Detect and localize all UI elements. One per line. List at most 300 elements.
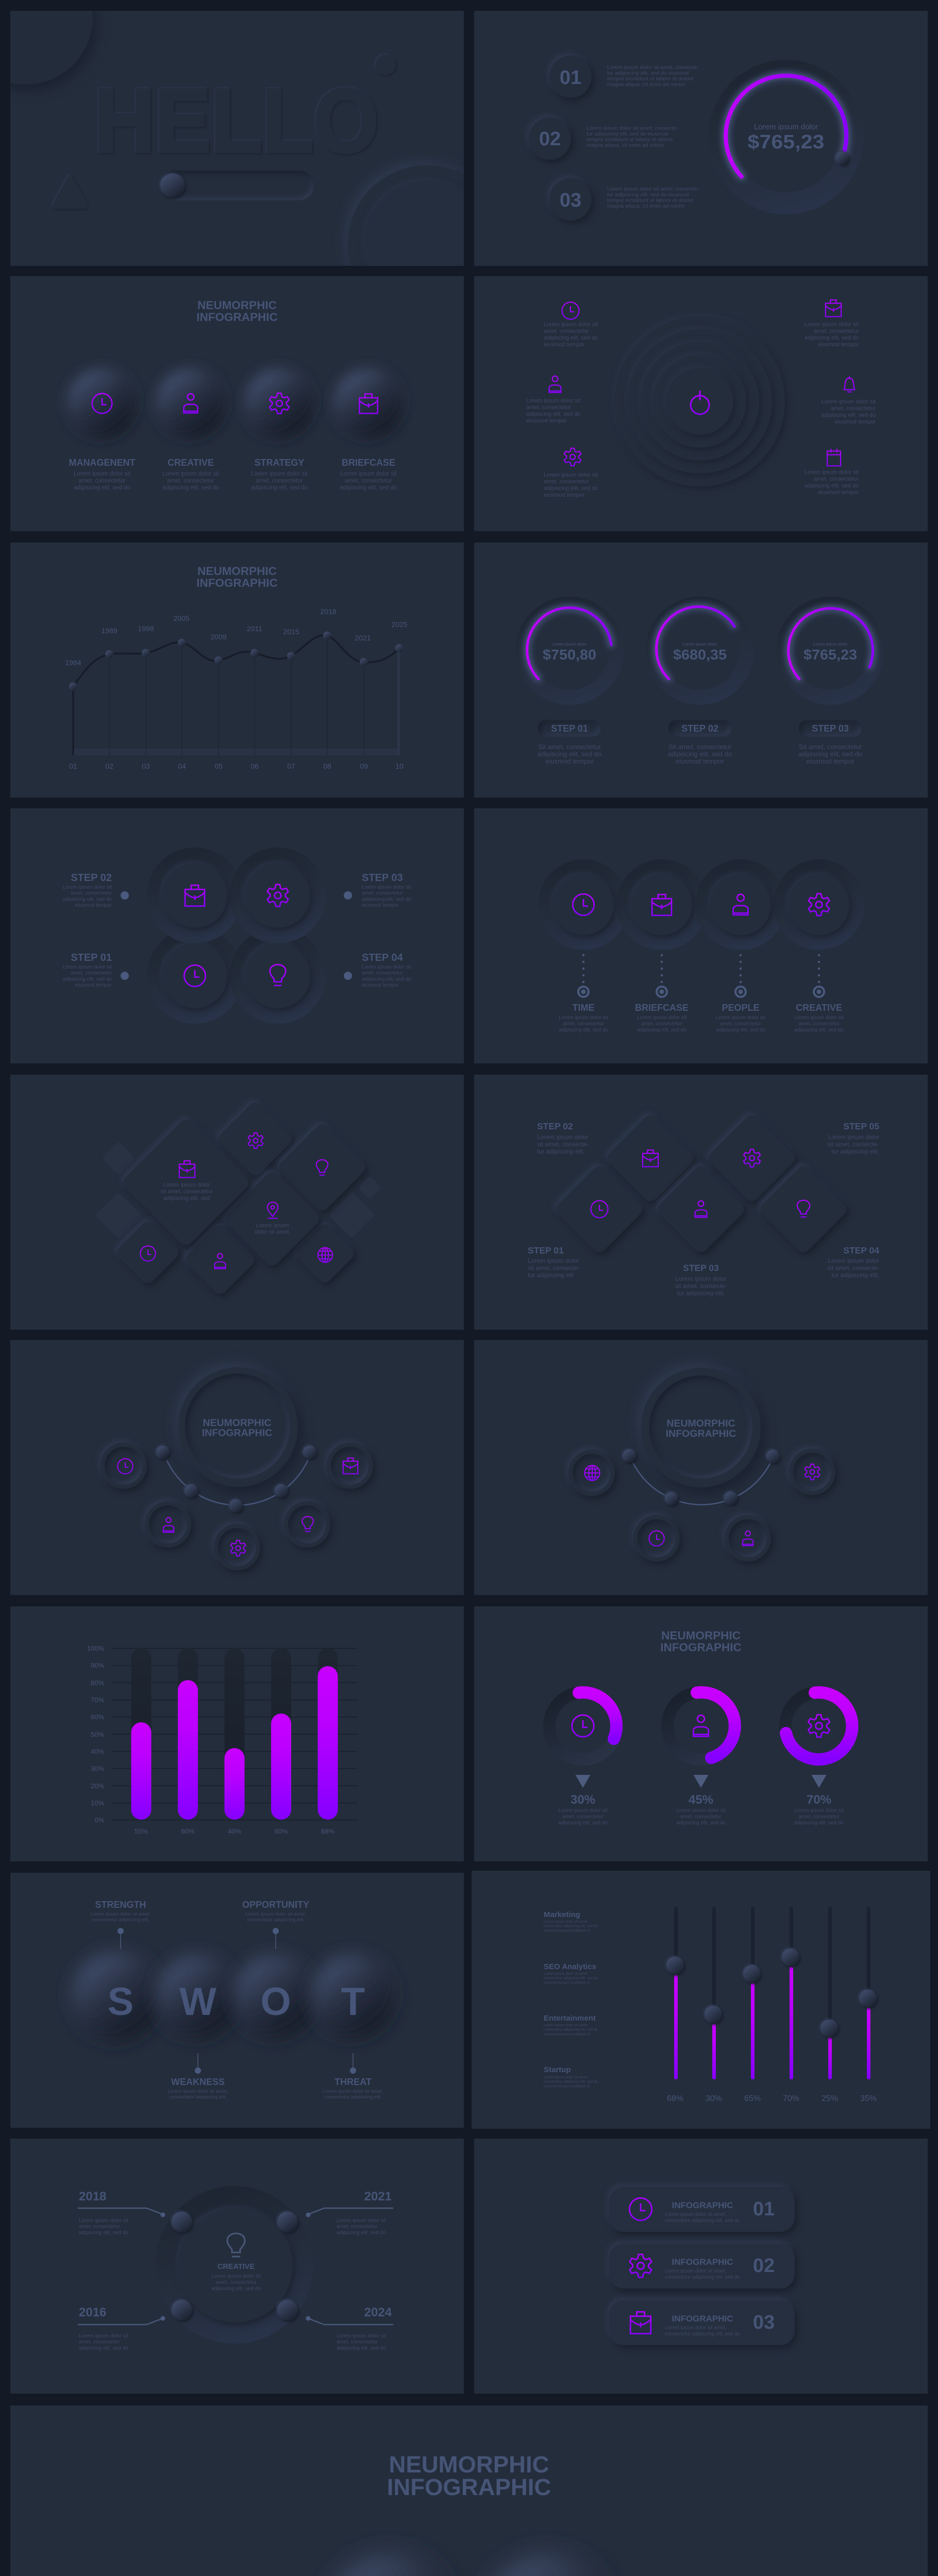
item bag: Lorem ipsum dolor sit [805,321,859,328]
weakness [167,2053,228,2100]
year 2018: amet, consectetur [79,2224,120,2230]
title: NEUMORPHIC [666,1418,735,1429]
item people: adipiscing elit, sed do [716,1027,765,1033]
satellite bulb [284,1501,330,1548]
gauge step 03: Lorem ipsum dolor [813,642,847,647]
item briefcase: BRIEFCASE [342,457,395,468]
label startup: Startup [544,2065,571,2074]
y axis labels: 60% [91,1713,104,1721]
diamond pin [223,1170,322,1268]
satellite clock [633,1515,680,1562]
year labels: 2011 [247,624,262,633]
step 02: Lorem ipsum dolor sit amet, consecte- [587,125,678,131]
threat: consectetur adipiscing elit, [324,2094,382,2100]
pill 02: consectetur adipiscing elit, sed do [665,2275,740,2280]
item calendar: eiusmod tempor [818,489,859,496]
item strategy [244,368,314,491]
pill 02: 02 [753,2255,775,2277]
diamond bulb [758,1163,849,1255]
bar 60 percent: 60% [181,1827,195,1835]
bar 55 percent: 55% [135,1827,148,1835]
item calendar: Lorem ipsum dolor sit [805,469,859,476]
panel: donut charts [474,1606,928,1861]
pill 01: Lorem ipsum dolor sit amet, [665,2212,727,2217]
step 02: magna aliqua. Ut enim ad minim [587,142,664,148]
weakness: Lorem ipsum dolor sit amet, [167,2089,228,2094]
gauge step 02: eiusmod tempor [676,757,724,765]
beads [156,1446,316,1513]
panel: line chart [10,543,464,798]
step 01 [528,1245,580,1279]
panel: five diamonds steps [474,1075,928,1330]
y axis labels: 40% [91,1748,104,1755]
diamond bag [605,1112,696,1204]
slider 35 percent [859,1907,877,2103]
step 03 [344,872,411,908]
icon: person [695,1201,707,1217]
year labels: 2021 [355,634,371,642]
icon: pin with text: dolor sit amet, [255,1229,291,1235]
icon: pin with text [255,1202,291,1235]
x axis labels: 08 [323,762,331,770]
swot letters: S [108,1980,133,2024]
connector arc [633,1463,770,1505]
year 2021: amet, consectetur [337,2224,378,2230]
pill 02: INFOGRAPHIC [672,2257,733,2267]
y axis labels: 30% [91,1765,104,1772]
hub [156,2186,313,2344]
pill 03: INFOGRAPHIC [672,2314,733,2324]
gauge step 03: $765,23 [803,647,857,663]
threat [323,2053,383,2100]
year labels: 2005 [173,614,190,622]
pill 02 [609,2244,795,2289]
label entertainment: Lorem ipsum dolor sit amet, [544,2024,588,2027]
item bag: amet, consectetur [814,328,859,334]
slider 30 percent: 30% [706,2094,722,2103]
step 02: adipiscing elit, sed do [62,896,112,902]
gauge step 03 [776,597,884,765]
diamond person [183,1223,257,1297]
icon: bulb [270,964,286,986]
gauge step 03: adipiscing elit, sed do [798,750,862,758]
item management: adipiscing elit, sed do [74,485,130,491]
item clock: amet, consectetur [544,328,589,334]
step 05: Lorem ipsum dolor [828,1133,879,1141]
item bell: Lorem ipsum dolor sit [822,399,876,405]
label startup: eiusmod tempor incididunt ut [544,2084,590,2088]
label startup: consectetur adipiscing elit, sed do [544,2080,598,2084]
step 02: sit amet, consecte- [537,1141,589,1148]
diamond person [655,1163,747,1255]
corner circle top left [10,11,95,89]
year 2024: 2024 [364,2306,392,2319]
panel: swot [10,1873,464,2128]
item person [526,376,580,424]
label marketing: consectetur adipiscing elit, sed do [544,1925,598,1928]
y axis labels: 90% [91,1662,104,1669]
step 04 [827,1245,879,1279]
icon: briefcase with text: Lorem ipsum dolor [163,1182,210,1188]
panel: four balls [10,276,464,531]
item gear: adipiscing elit, sed do [544,485,598,492]
decorative diamonds [95,1141,381,1239]
item management: MANAGENENT [69,457,136,468]
item creative: CREATIVE [167,457,214,468]
item strategy: adipiscing elit, sed do [251,485,308,491]
label marketing: eiusmod tempor incididunt ut [544,1929,590,1933]
label seo analytics: eiusmod tempor incididunt ut [544,1981,590,1985]
gauge step 02: Lorem ipsum dolor [683,642,717,647]
step 01: adipiscing elit, sed do [62,976,112,982]
item briefcase: amet, consectetur [641,1021,682,1027]
step 04: tur adipiscing elit, [831,1272,879,1279]
x axis labels: 05 [214,762,223,770]
item calendar [805,449,859,496]
step 02: eiusmod tempor [75,903,112,908]
item creative: adipiscing elit, sed do [162,485,219,491]
x axis labels: 10 [395,762,404,770]
item briefcase [635,894,689,1033]
item clock: Lorem ipsum dolor sit [544,321,598,328]
bar 88 percent: 88% [321,1827,334,1835]
step 03: STEP 03 [362,872,403,884]
x axis labels: 02 [105,762,113,770]
icon: pin with text: Lorem ipsum [256,1223,289,1229]
year 2016: amet, consectetur [79,2340,120,2345]
donut 30 percent: 30% [571,1793,595,1807]
toggle switch [160,171,314,200]
label seo analytics: SEO Analytics [544,1962,596,1971]
donut 70 percent [785,1692,852,1826]
donut 30 percent: Lorem ipsum dolor sit [558,1808,608,1814]
icon: clock [184,965,206,987]
donut 45 percent: adipiscing elit, sed do [676,1820,726,1826]
step 04: sit amet, consecte- [827,1264,879,1272]
donut 45 percent: Lorem ipsum dolor sit [676,1808,726,1814]
icon: globe [318,1248,332,1262]
gauge step 01: Lorem ipsum dolor [552,642,587,647]
swot letters: W [179,1980,216,2024]
panel: sliders [472,1871,930,2129]
diamond gear [216,1100,294,1178]
opportunity: OPPORTUNITY [242,1900,309,1910]
step 04: Lorem ipsum dolor [828,1257,879,1264]
bar 40 percent: 40% [228,1827,241,1835]
diamond bulb [276,1122,368,1213]
slider 35 percent: 35% [860,2094,877,2103]
pill 01: INFOGRAPHIC [672,2200,733,2210]
item person: eiusmod tempor [526,418,567,424]
item briefcase: BRIEFCASE [635,1003,689,1013]
label entertainment [544,2014,598,2036]
threat: THREAT [334,2077,372,2087]
item briefcase: Lorem ipsum dolor sit [637,1015,686,1021]
step 04 [344,952,411,988]
year labels: 2025 [391,620,408,629]
satellite gear [214,1524,260,1570]
label startup: Lorem ipsum dolor sit amet, [544,2076,588,2079]
y axis labels: 10% [91,1799,104,1807]
strength [90,1900,151,1949]
title: NEUMORPHIC [389,2451,549,2478]
label startup [544,2065,598,2088]
step 01 [62,952,129,988]
icon: gear [744,1149,760,1167]
step 02: Lorem ipsum dolor [537,1133,588,1141]
slider 68 percent: 68% [667,2094,683,2103]
donut 30 percent [549,1692,616,1826]
step 02 [62,872,129,908]
panel: concentric rings [474,276,928,531]
radial gauge: $765,23 [747,131,825,153]
donut 45 percent: 45% [689,1793,713,1807]
step 01: Lorem ipsum dolor [528,1257,579,1264]
item gear: eiusmod tempor [544,492,584,498]
gauge step 01 [515,597,624,765]
gauge step 02: $680,35 [673,647,727,663]
icon: clock [591,1200,608,1218]
radial gauge [709,60,863,214]
satellite person [725,1515,771,1562]
label seo analytics: Lorem ipsum dolor sit amet, [544,1972,588,1976]
step 04: amet, consectetur [362,971,403,976]
title: NEUMORPHIC [197,299,277,312]
panel: large four balls [10,2405,928,2576]
item management: Lorem ipsum dolor sit [74,471,130,477]
x axis labels: 09 [360,762,368,770]
step 01: tur adipiscing elit, sed do eiusmod [607,70,689,76]
step 05: tur adipiscing elit, [831,1148,879,1155]
step 01 [549,56,699,98]
slider 25 percent: 25% [822,2094,838,2103]
diamond clock [554,1163,645,1255]
hello heading: HELLO [94,71,379,172]
title: NEUMORPHIC [197,565,277,578]
step 01: Lorem ipsum dolor sit [62,964,112,970]
icon: gear [267,885,288,906]
bar 88 percent [317,1648,338,1835]
icon: briefcase [643,1150,658,1167]
y axis labels: 20% [91,1782,104,1790]
x axis labels: 07 [287,762,295,770]
step 02 [529,117,678,160]
corner circle bottom right [343,160,454,259]
step 03: adipiscing elit, sed do [362,896,411,902]
gauge step 01: $750,80 [543,647,596,663]
year 2021: Lorem ipsum dolor sit [337,2218,386,2224]
year 2024: adipiscing elit, sed do [337,2345,386,2351]
title: INFOGRAPHIC [196,311,278,324]
year 2024 [306,2306,393,2351]
pill 01: consectetur adipiscing elit, sed do [665,2218,740,2224]
item creative [794,894,844,1033]
step 03: tempor incididunt ut labore et dolore [607,197,694,204]
bar 60 percent [178,1648,198,1835]
strength: consectetur adipiscing elit, [92,1917,149,1923]
x axis labels [69,762,404,770]
panel: three gauges [474,543,928,798]
item time: Lorem ipsum dolor sit [559,1015,608,1021]
slider 68 percent [666,1907,684,2103]
panel: diamond mosaic [10,1075,464,1330]
gauge step 02: Sit amet, consectetur [668,743,731,751]
slider 65 percent: 65% [744,2094,761,2103]
step 03: Lorem ipsum dolor sit [362,885,411,890]
gauge step 01: Sit amet, consectetur [538,743,601,751]
label marketing: Lorem ipsum dolor sit amet, [544,1920,588,1924]
gauge step 03: STEP 03 [812,723,849,734]
step 02: STEP 02 [537,1121,573,1131]
label marketing: Marketing [544,1910,580,1919]
panel: hub with four satellites [474,1340,928,1595]
item management [67,368,137,491]
title: NEUMORPHIC [203,1417,272,1429]
step 04: STEP 04 [362,952,404,963]
item bell [822,376,876,425]
pill 01: 01 [753,2198,775,2220]
threat: Lorem ipsum dolor sit amet, [323,2089,383,2094]
step 01: magna aliqua. Ut enim ad minim [607,81,685,88]
item clock: adipiscing elit, sed do [544,335,598,341]
step 01: Lorem ipsum dolor sit amet, consecte- [607,64,699,71]
panel: bar chart [10,1606,464,1861]
step 01: tur adipiscing elit [528,1272,574,1279]
item bell: adipiscing elit, sed do [822,412,876,418]
item creative: amet, consectetur [167,478,214,484]
icon: bulb [227,2233,245,2257]
beads [623,1449,780,1505]
center text [211,2263,261,2292]
x axis labels: 04 [178,762,186,770]
item person: Lorem ipsum dolor sit [526,398,580,404]
pill 02: Lorem ipsum dolor sit amet, [665,2268,727,2274]
triangle [55,178,86,206]
opportunity [242,1900,309,1949]
item clock [544,302,598,348]
panel: gauge with numbered steps [474,11,928,266]
satellite gear [789,1449,835,1495]
beads [172,2212,298,2320]
step 03 [549,178,699,221]
step 02: amet, consectetur [71,891,112,896]
step 03: tur adipiscing elit, [677,1290,725,1297]
item gear: amet, consectetur [544,479,589,485]
item time: amet, consectetur [563,1021,604,1027]
item bag [805,300,859,348]
data points [69,632,404,690]
step 03: 03 [560,190,581,211]
year 2018: adipiscing elit, sed do [79,2230,128,2235]
center text: amet, consectetur [215,2280,257,2285]
item calendar: adipiscing elit, sed do [805,483,859,489]
item creative: Lorem ipsum dolor sit [162,471,219,477]
year 2018: 2018 [79,2190,106,2204]
item clock: eiusmod tempor [544,342,584,348]
grid lines [112,1649,357,1820]
step 04: STEP 04 [843,1245,879,1256]
gauge step 02: STEP 02 [681,723,718,734]
step 03: amet, consectetur [362,891,403,896]
icon: power [691,391,709,414]
panel: hub with five satellites [10,1340,464,1595]
item briefcase [333,368,404,491]
slider 70 percent: 70% [783,2094,799,2103]
year 2024: Lorem ipsum dolor sit [337,2333,386,2339]
y axis labels: 0% [94,1816,104,1824]
center text: CREATIVE [217,2263,255,2271]
x axis labels: 06 [250,762,259,770]
year labels: 2009 [210,633,227,641]
donut 70 percent: Lorem ipsum dolor sit [794,1808,844,1814]
gauge step 01: eiusmod tempor [545,757,594,765]
icon: gear [248,1133,263,1148]
step 03: sit amet, consecte- [675,1282,727,1290]
icon: bulb [797,1200,810,1217]
donut 70 percent: amet, consectetur [798,1814,840,1820]
item people: Lorem ipsum dolor sit [716,1015,765,1021]
item people: amet, consectetur [720,1021,761,1027]
icon: briefcase with text: adipiscing elit, sed [163,1195,210,1201]
step 02: STEP 02 [71,872,112,884]
step 01: eiusmod tempor [75,982,112,988]
step 03: Lorem ipsum dolor sit amet, consecte- [607,186,699,192]
step 01: tempor incididunt ut labore et dolore [607,76,694,82]
radial gauge: Lorem ipsum dolor [754,123,818,131]
year 2018: Lorem ipsum dolor sit [79,2218,128,2224]
title: INFOGRAPHIC [196,577,278,589]
donut 70 percent: 70% [807,1793,831,1807]
area chart [73,635,400,755]
diamond gear [706,1112,798,1204]
weakness: consectetur adipiscing elit, [169,2094,227,2100]
title: INFOGRAPHIC [660,1641,742,1654]
step 04: eiusmod tempor [362,982,399,988]
item briefcase: Lorem ipsum dolor sit [340,471,397,477]
year labels: 1989 [101,626,118,635]
icon: clock [140,1246,156,1261]
icon: bulb [316,1160,328,1175]
donut 45 percent [667,1692,735,1826]
weakness: WEAKNESS [171,2077,225,2087]
slider 25 percent [820,1907,838,2103]
step 01: amet, consectetur [71,971,112,976]
label entertainment: Entertainment [544,2014,596,2023]
step 01: STEP 01 [71,952,112,963]
item bell: amet, consectetur [831,405,876,412]
hub circle [641,1368,761,1487]
item calendar: amet, consectetur [814,476,859,482]
swot letters [108,1980,365,2024]
item people: PEOPLE [722,1003,760,1013]
item time: adipiscing elit, sed do [559,1027,608,1033]
center text: adipiscing elit, sed do [211,2286,261,2292]
year labels: 2018 [320,607,337,616]
step 03: tur adipiscing elit, sed do eiusmod [607,192,689,198]
panel: three pills [474,2139,928,2394]
icon: briefcase [185,885,205,906]
y axis labels: 50% [91,1731,104,1738]
step 02 [537,1121,589,1155]
item bag: eiusmod tempor [818,342,859,348]
x axis labels: 03 [142,762,150,770]
step 03: Lorem ipsum dolor [675,1275,727,1282]
label entertainment: eiusmod tempor incididunt ut [544,2032,590,2036]
label entertainment: consectetur adipiscing elit, sed do [544,2028,598,2032]
title: INFOGRAPHIC [387,2474,551,2500]
y axis labels: 100% [87,1645,104,1652]
satellite clock [100,1443,147,1489]
